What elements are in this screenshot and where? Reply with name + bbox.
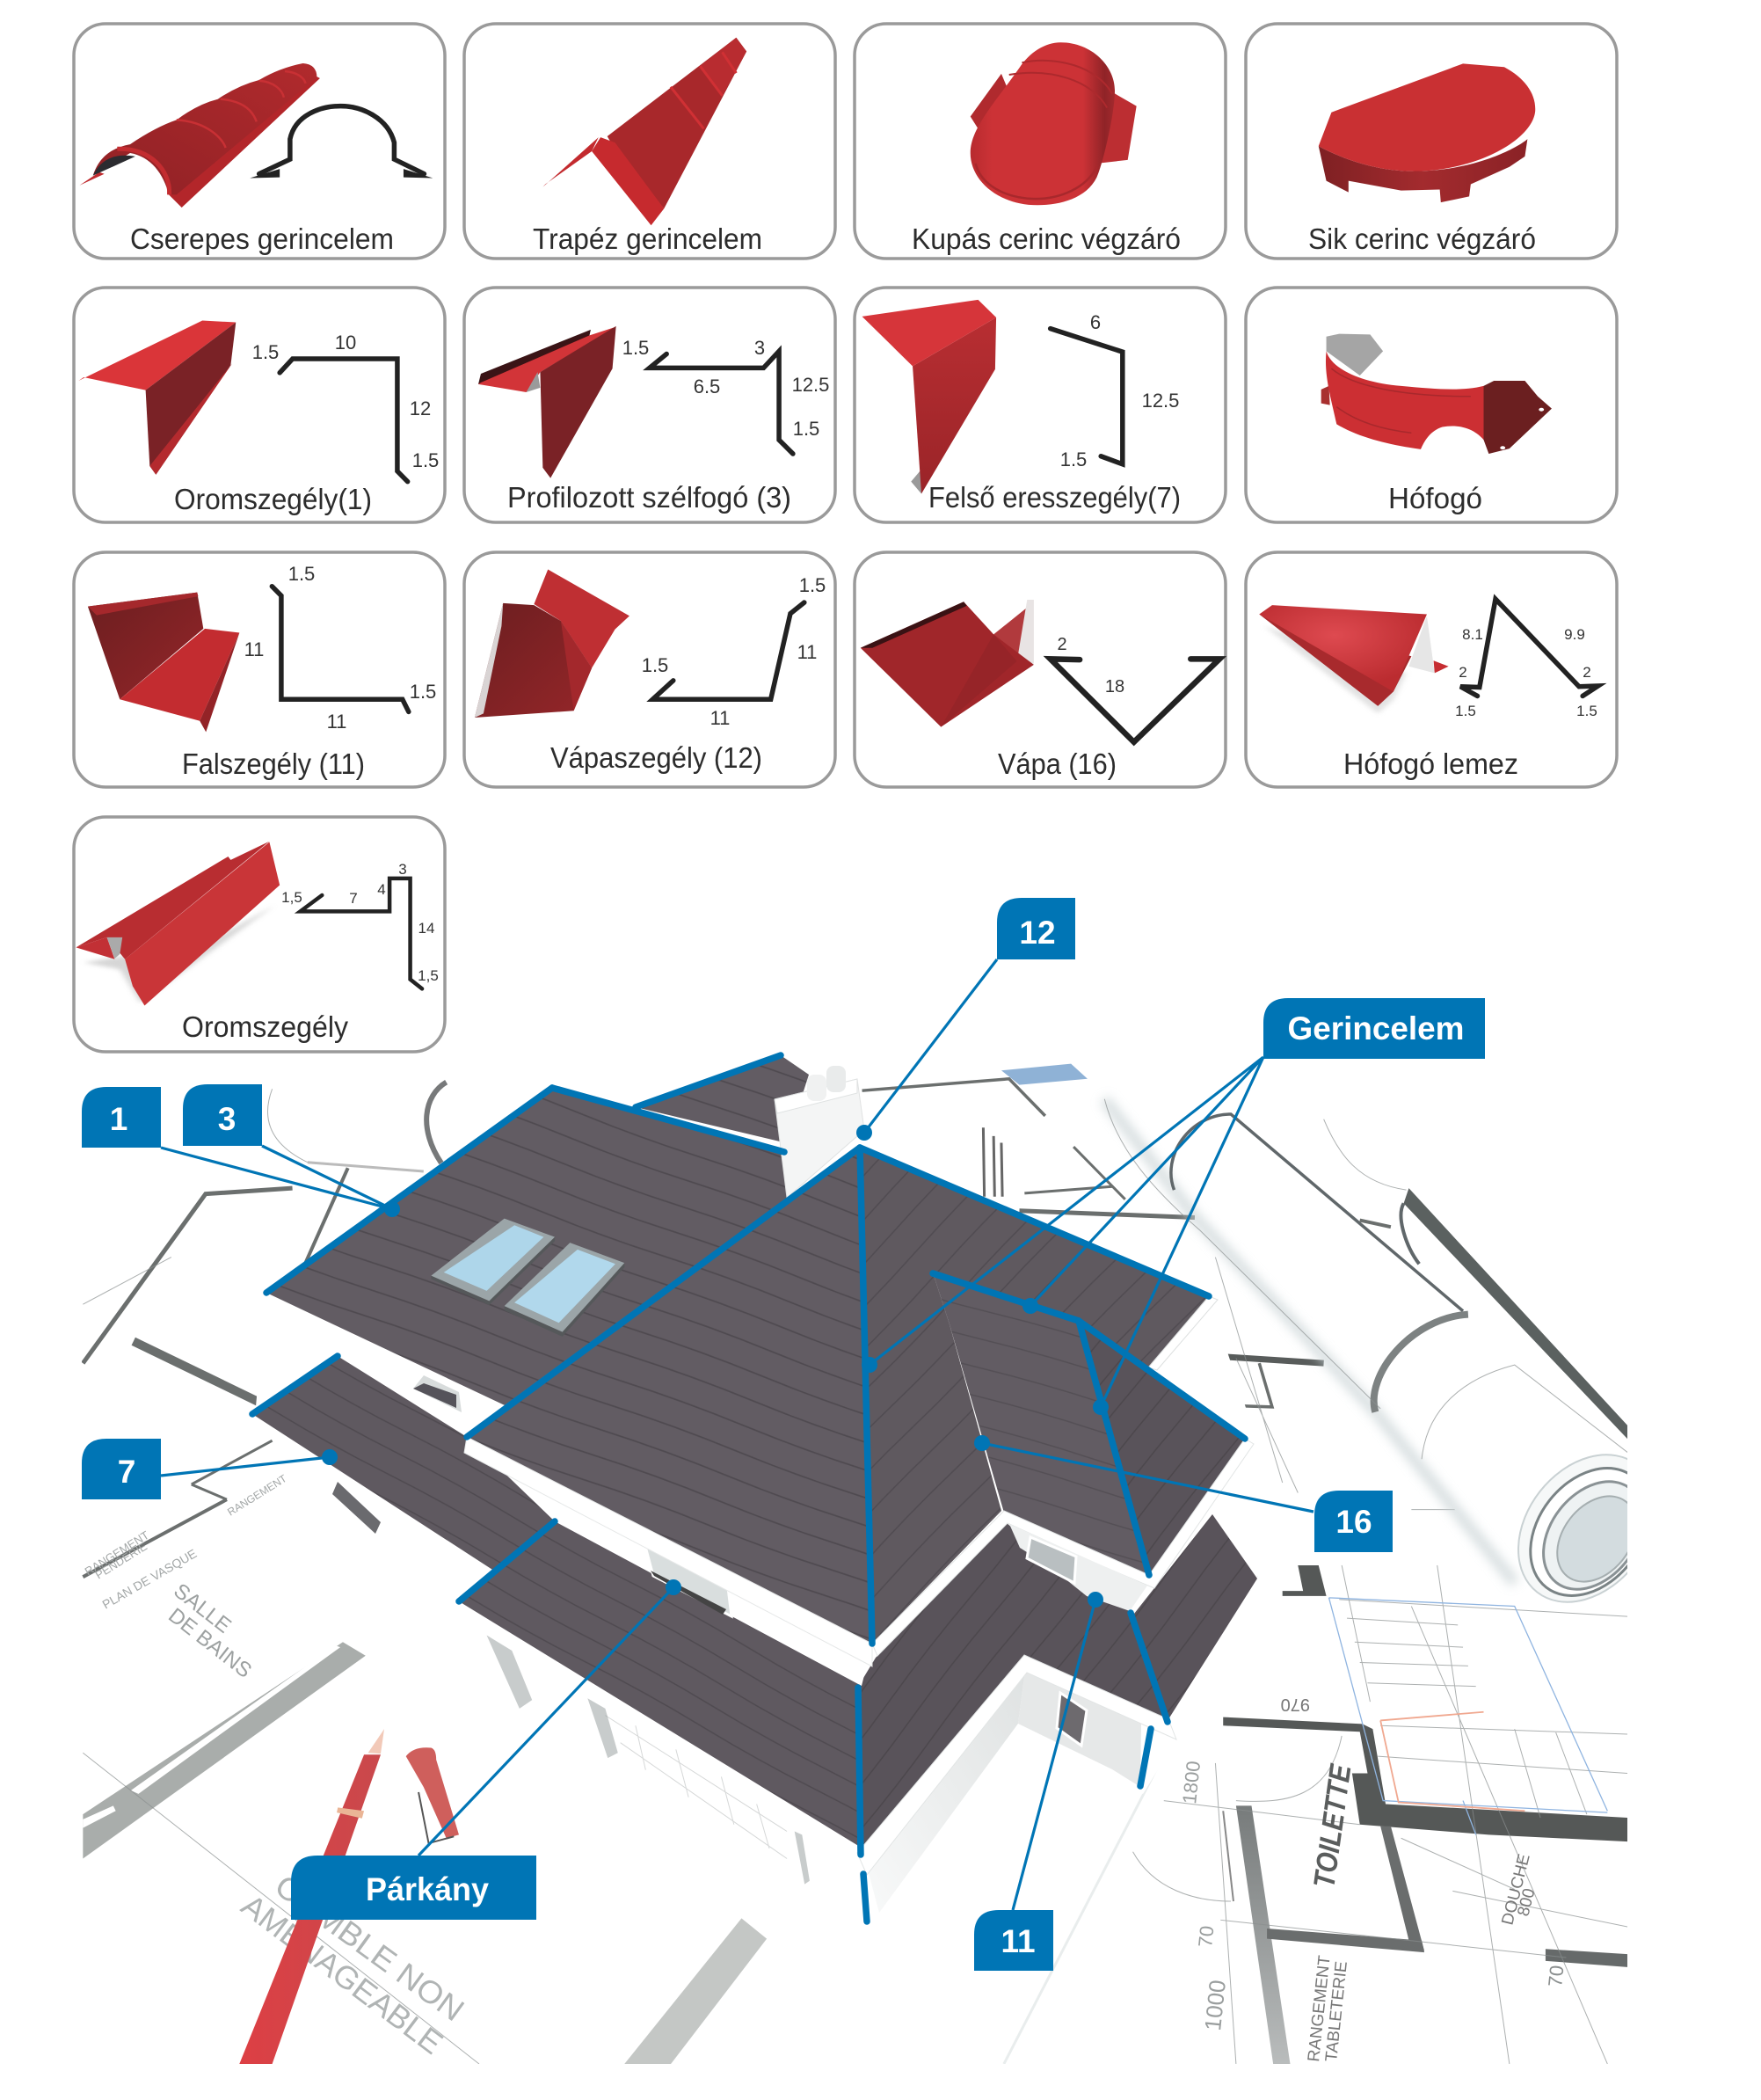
lower storey windows	[487, 1635, 810, 1885]
label: Hófogó	[1388, 482, 1482, 514]
callout: 1	[82, 1087, 400, 1217]
dimensions: 1.5	[410, 681, 436, 703]
dimensions: 3	[398, 861, 407, 878]
plan text: TOILETTE: TOILETTE	[1307, 1761, 1358, 1890]
dimensions: 4	[377, 881, 386, 898]
callout: 7	[82, 1439, 338, 1499]
icon: valley flashing profile drawing	[652, 602, 804, 699]
label: Sik cerinc végzáró	[1308, 222, 1536, 255]
callout: 3: 3	[218, 1101, 236, 1137]
dimensions: 1.5	[642, 654, 668, 676]
panel: Hófogó lemez	[1246, 552, 1617, 787]
plan walls: lower sheet and pen	[83, 1642, 767, 2064]
callout: 16: 16	[1335, 1504, 1372, 1540]
dimensions: 6.5	[694, 376, 720, 397]
label: Profilozott szélfogó (3)	[507, 481, 791, 514]
icon: trapezoid ridge	[542, 38, 746, 225]
dimensions: 1.5	[1576, 703, 1597, 719]
icon: stepped gable flashing	[76, 842, 280, 1006]
dimensions: 9.9	[1564, 626, 1585, 643]
callout: 16	[974, 1435, 1393, 1552]
label: Oromszegély	[182, 1010, 348, 1043]
rolled plans	[1099, 1095, 1627, 1603]
plan lines: upper left sheet	[83, 1083, 447, 1577]
panel: Kupás cerinc végzáró	[855, 24, 1226, 259]
icon: eaves profile drawing	[1051, 329, 1123, 464]
roof edge highlights	[252, 1055, 1245, 1921]
plan text: left sheet: COMBLE NON	[268, 1867, 471, 2028]
dimensions	[244, 563, 436, 733]
callout: 1: 1	[110, 1101, 127, 1137]
callout: Gerincelem	[862, 998, 1485, 1415]
plan text: dimensions and room names: 800	[1514, 1886, 1539, 1918]
icon: flashing profile drawing	[280, 359, 408, 482]
dimensions: 2	[1057, 635, 1067, 654]
roof: main right plane	[860, 1148, 1209, 1644]
icon: domed ridge end cap	[971, 42, 1137, 205]
dimensions: 11	[797, 641, 817, 663]
icon: gable flashing	[78, 321, 236, 475]
plan lines: right sheet behind the rolls	[862, 1064, 1463, 1510]
dimensions	[1060, 311, 1179, 470]
dimensions	[622, 337, 829, 440]
dimensions: 1.5	[1060, 448, 1087, 470]
label: Oromszegély(1)	[174, 483, 372, 515]
roof: back ridge plane	[636, 1055, 809, 1143]
callout: 12: 12	[1019, 915, 1056, 951]
plan text: dimensions and room names: 70	[1544, 1965, 1568, 1988]
callout: 11: 11	[1001, 1923, 1036, 1959]
callout: 12	[856, 898, 1075, 1141]
roll body	[1454, 1509, 1463, 1511]
right plane fascia	[1148, 1296, 1218, 1370]
dimensions	[281, 861, 439, 984]
dimensions: 1.5	[252, 341, 279, 363]
plan text: left sheet: PLAN DE VASQUE	[100, 1546, 199, 1612]
plan text: dimensions and room names: RANGEMENT	[1305, 1954, 1335, 2063]
fascia under lower wing	[857, 1655, 1176, 1875]
roof: upper left plane	[266, 1088, 787, 1405]
icon: half-round profile drawing	[250, 106, 433, 178]
roof: lower front strip	[459, 1521, 862, 1847]
dimensions: 6	[1090, 311, 1101, 333]
roof: main left plane	[467, 1148, 872, 1644]
dimensions	[1455, 626, 1597, 719]
label: Felső eresszegély(7)	[928, 481, 1181, 514]
dimensions: 1.5	[288, 563, 315, 585]
icon: snow guard bracket	[1321, 334, 1552, 454]
panel: Hófogó	[1246, 288, 1617, 522]
plan text: left sheet: SALLE	[169, 1579, 236, 1638]
dimensions: 2	[1583, 664, 1591, 681]
pen and cap	[239, 1729, 459, 2064]
roll end spiral	[1517, 1454, 1627, 1603]
dimensions: 11	[710, 707, 730, 729]
icon: stepped flashing profile drawing	[301, 879, 422, 988]
plan text: left sheet: DE BAINS	[164, 1603, 256, 1683]
dimensions	[642, 574, 826, 729]
icon: upper eaves flashing	[862, 300, 996, 493]
dimensions: 12.5	[792, 374, 829, 396]
label: Cserepes gerincelem	[130, 222, 394, 255]
dimensions: 1.5	[412, 449, 439, 471]
icon: wall flashing profile drawing	[272, 587, 409, 711]
background photo: blueprints and rolled plans	[83, 1064, 1684, 2064]
dimensions: 7	[349, 890, 358, 907]
roof: lower left strip	[252, 1356, 555, 1576]
dimensions: 1,5	[281, 889, 302, 906]
front window	[643, 1536, 731, 1616]
panel: Falszegély (11)	[74, 552, 445, 787]
roof: dormer right face	[1079, 1321, 1245, 1575]
plan text: left sheet: AMENAGEABLE	[235, 1887, 449, 2061]
plan text: left sheet: RANGEMENT	[225, 1472, 289, 1519]
plan text: dimensions and room names: 970	[1281, 1695, 1310, 1714]
callout: Gerincelem: Gerincelem	[1287, 1010, 1465, 1046]
label: Kupás cerinc végzáró	[912, 222, 1181, 255]
dimensions: 11	[244, 638, 264, 660]
callout: Párkány	[291, 1579, 681, 1920]
label: Falszegély (11)	[182, 747, 365, 780]
icon: snow guard sheet	[1259, 605, 1449, 713]
chimney	[775, 1066, 864, 1198]
dimensions	[252, 332, 439, 471]
panel: Trapéz gerincelem	[464, 24, 835, 259]
callout: Párkány: Párkány	[366, 1871, 489, 1907]
plan lines: toilet floor plan	[1004, 1565, 1627, 2064]
plan text: dimensions and room names: 1000	[1199, 1979, 1231, 2032]
dimensions: 14	[418, 920, 434, 937]
roll outlines and bands	[1104, 1099, 1627, 1459]
panel: Vápa (16)	[855, 552, 1226, 787]
icon: wind guard profile drawing	[650, 351, 793, 454]
panel: Profilozott szélfogó (3)	[464, 288, 835, 522]
left wall under lower wing	[869, 1671, 1025, 1913]
house base silhouette	[255, 1055, 1257, 1930]
roof: lower right wing	[858, 1514, 1257, 1855]
plan text: left sheet	[83, 1472, 471, 2061]
plan text: left sheet: PENDERIE	[93, 1539, 149, 1582]
dimensions: 12.5	[1142, 390, 1179, 412]
right wall under lower wing	[1018, 1671, 1141, 1787]
house model	[252, 1055, 1257, 1930]
dimensions: 1,5	[418, 967, 439, 984]
dimensions: 18	[1105, 677, 1124, 696]
plan text: dimensions and room names	[1178, 1695, 1568, 2063]
plan text: dimensions and room names: 70	[1194, 1925, 1219, 1949]
callout: 3	[183, 1084, 387, 1207]
panel: Felső eresszegély (7)	[855, 288, 1226, 522]
dormer wall with window	[1009, 1524, 1147, 1611]
plan text: dimensions and room names: DOUCHE	[1498, 1852, 1534, 1927]
dimensions	[1057, 635, 1124, 696]
dimensions: 1.5	[1455, 703, 1476, 719]
roll shadow edges	[1104, 1099, 1515, 1583]
plan text: left sheet: RANGEMENT	[83, 1528, 151, 1579]
panel: Vápaszegély (12)	[464, 552, 835, 787]
skylights	[431, 1219, 624, 1337]
icon: valley profile drawing	[1051, 659, 1219, 742]
icon: valley sheet	[861, 600, 1034, 727]
dimensions: 12	[410, 397, 431, 419]
panel: Oromszegély (1)	[74, 288, 445, 522]
side door window	[1057, 1693, 1087, 1746]
icon: wall flashing	[88, 593, 239, 732]
panel: Oromszegély	[74, 817, 445, 1052]
label: Vápa (16)	[998, 747, 1117, 780]
dimensions: 10	[335, 332, 356, 354]
label: Trapéz gerincelem	[533, 222, 762, 255]
plan text: dimensions and room names: 1800	[1178, 1760, 1204, 1805]
label: Vápaszegély (12)	[550, 741, 762, 774]
fascia: dormer and right eaves	[872, 1439, 1254, 1656]
dimensions: 1.5	[793, 418, 819, 440]
roof: dormer left face	[933, 1272, 1149, 1575]
dimensions: 1.5	[799, 574, 826, 596]
callout: 7: 7	[118, 1454, 135, 1490]
dimensions: 8.1	[1462, 626, 1483, 643]
upper storey window	[413, 1375, 462, 1412]
callout: 11	[974, 1592, 1103, 1971]
dimensions: 1.5	[622, 337, 649, 359]
lower strip window	[332, 1482, 381, 1534]
dimensions: 3	[754, 337, 765, 359]
panel: Cserepes gerincelem	[74, 24, 445, 259]
icon: snow guard sheet profile drawing	[1460, 599, 1598, 696]
icon: profiled wind guard	[478, 326, 616, 478]
panel: Sik cerinc végzáró	[1246, 24, 1617, 259]
label: Hófogó lemez	[1343, 747, 1518, 780]
icon: half-round tile ridge	[80, 63, 320, 208]
dimensions: 2	[1459, 664, 1467, 681]
fascia: main eaves	[464, 1437, 872, 1666]
icon: flat ridge end cap	[1319, 63, 1535, 202]
plan text: dimensions and room names: TABLETERIE	[1322, 1960, 1351, 2063]
icon: valley flashing	[475, 570, 629, 718]
wall between roof planes	[338, 1356, 872, 1686]
dimensions: 11	[327, 711, 346, 733]
